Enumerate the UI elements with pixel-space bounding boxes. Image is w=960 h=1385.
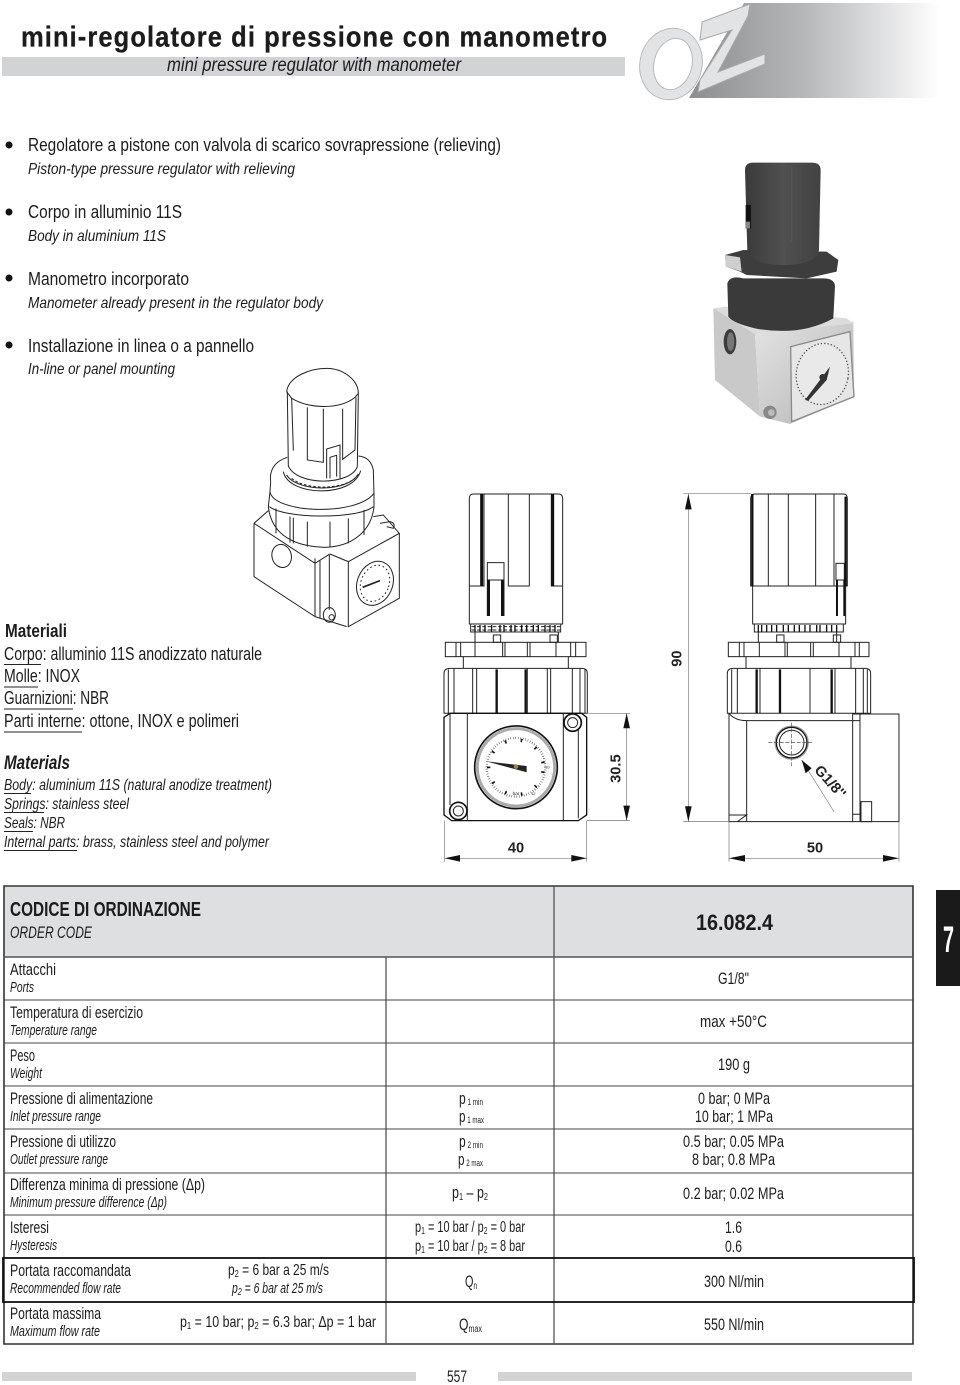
- row: outlet pressure: p: [458, 1150, 467, 1169]
- row: recommended flow rate, highlighted: 2: [235, 1269, 239, 1280]
- order table: [3, 886, 914, 1344]
- row: outlet pressure: 2 max: [464, 1158, 483, 1168]
- row: minimum pressure difference: p: [452, 1183, 461, 1202]
- feature list: Regolatore a pistone con valvola di scarico sovrapressione (relieving): [28, 135, 501, 155]
- row: maximum flow rate: = 6.3 bar; Δp = 1 bar: [259, 1314, 377, 1331]
- side elevation technical drawing: [670, 493, 899, 862]
- row: minimum pressure difference: 2: [484, 1192, 488, 1203]
- row: inlet pressure: 1 min: [466, 1097, 483, 1107]
- dimension 50: [729, 822, 899, 862]
- row: recommended flow rate, highlighted: Q: [465, 1272, 478, 1291]
- table header: ORDER CODE: [10, 923, 92, 942]
- row: ports: G1/8": [718, 969, 749, 988]
- row: minimum pressure difference: Differenza minima di pressione (Δp): [10, 1175, 205, 1194]
- row: weight: [10, 1046, 750, 1082]
- materials block: Italian: Corpo: alluminio 11S anodizzato naturale: [4, 644, 262, 664]
- row: weight: Weight: [10, 1066, 43, 1082]
- row: weight: 190 g: [718, 1055, 750, 1074]
- row: recommended flow rate, highlighted: 2: [237, 1287, 242, 1298]
- row: outlet pressure: Pressione di utilizzo: [10, 1132, 116, 1151]
- row: maximum flow rate: 1: [187, 1321, 192, 1332]
- materials block: English: Materials: [4, 753, 70, 774]
- row: hysteresis: Isteresi: [10, 1218, 49, 1237]
- row: hysteresis: p: [415, 1238, 424, 1255]
- row: minimum pressure difference: p: [477, 1183, 486, 1202]
- flange and nut front: [444, 642, 587, 713]
- row: recommended flow rate, highlighted: p: [232, 1281, 240, 1297]
- title: mini-regolatore di pressione con manometro: [21, 20, 607, 53]
- row: maximum flow rate: Q: [459, 1315, 472, 1334]
- row: hysteresis: 1: [421, 1226, 425, 1237]
- row: outlet pressure: 8 bar; 0.8 MPa: [692, 1150, 775, 1169]
- row: maximum flow rate: Portata massima: [10, 1304, 101, 1323]
- row: recommended flow rate, highlighted: Portata raccomandata: [10, 1261, 131, 1280]
- row: temperature: max +50°C: [700, 1012, 767, 1031]
- row: outlet pressure: Outlet pressure range: [10, 1152, 108, 1168]
- row: minimum pressure difference: 1: [459, 1192, 463, 1203]
- feature list: In-line or panel mounting: [28, 361, 175, 378]
- row: ports: Ports: [10, 980, 34, 996]
- footer with page number: [2, 1367, 912, 1385]
- dimension G1/8: [802, 760, 849, 812]
- row: temperature: Temperature range: [10, 1023, 97, 1039]
- row: recommended flow rate, highlighted: = 6 bar a 25 m/s: [239, 1262, 329, 1279]
- isometric line drawing of regulator: [254, 368, 400, 627]
- row: ports: [10, 960, 749, 996]
- row: recommended flow rate, highlighted: [3, 1258, 914, 1302]
- row: temperature: [10, 1003, 767, 1039]
- row: hysteresis: = 8 bar: [488, 1238, 525, 1255]
- row: minimum pressure difference: 0.2 bar; 0.02 MPa: [683, 1184, 784, 1203]
- row: maximum flow rate: = 10 bar; p: [191, 1314, 254, 1331]
- subtitle band: [2, 55, 625, 76]
- row: inlet pressure: 1 max: [465, 1115, 484, 1125]
- dimension 30.5: 30.5: [609, 754, 625, 783]
- row: ports: Attacchi: [10, 960, 56, 979]
- row: hysteresis: p: [415, 1219, 424, 1236]
- row: inlet pressure: Inlet pressure range: [10, 1109, 101, 1125]
- row: minimum pressure difference: –: [463, 1183, 477, 1202]
- row: recommended flow rate, highlighted: p: [228, 1262, 237, 1279]
- row: inlet pressure: p: [459, 1089, 468, 1108]
- row: maximum flow rate: [10, 1304, 764, 1340]
- row: recommended flow rate, highlighted: n: [473, 1281, 477, 1292]
- row: hysteresis: 0.6: [725, 1237, 742, 1256]
- row: inlet pressure: 0 bar; 0 MPa: [698, 1089, 770, 1108]
- row: hysteresis: 1: [421, 1245, 425, 1256]
- row: maximum flow rate: max: [468, 1324, 482, 1335]
- row: hysteresis: 1.6: [725, 1218, 742, 1237]
- row: inlet pressure: 10 bar; 1 MPa: [695, 1107, 773, 1126]
- body front with gauge: 10: [545, 765, 550, 770]
- row: minimum pressure difference: [10, 1175, 784, 1211]
- materials block: Italian: Parti interne: ottone, INOX e polimeri: [4, 711, 239, 731]
- body front with gauge: bar: [513, 791, 520, 796]
- body front with gauge: [444, 713, 587, 821]
- table header: [4, 886, 913, 957]
- feature list: [6, 135, 501, 378]
- row: hysteresis: = 10 bar / p: [425, 1238, 484, 1255]
- row: minimum pressure difference: Minimum pressure difference (Δp): [10, 1195, 167, 1211]
- row: temperature: Temperatura di esercizio: [10, 1003, 143, 1022]
- dimension 90: [670, 493, 751, 822]
- product photo: [713, 163, 854, 424]
- row: outlet pressure: [10, 1132, 784, 1169]
- flange and nut side: [727, 642, 871, 713]
- subtitle band: mini pressure regulator with manometer: [167, 55, 462, 76]
- dimension G1/8: G1/8'': [811, 763, 849, 802]
- materials block: Italian: Guarnizioni: NBR: [4, 688, 109, 708]
- row: inlet pressure: p: [459, 1107, 468, 1126]
- feature list: Manometer already present in the regulator body: [28, 295, 324, 312]
- logo: az with grey gradient band: [632, 3, 940, 106]
- row: hysteresis: Hysteresis: [10, 1238, 57, 1254]
- materials block: Italian: [4, 621, 262, 732]
- row: outlet pressure: 0.5 bar; 0.05 MPa: [683, 1132, 784, 1151]
- knob front: [469, 494, 563, 642]
- body side with port: [729, 713, 899, 822]
- body front with gauge: 12: [531, 791, 536, 796]
- feature list: Piston-type pressure regulator with relieving: [28, 161, 295, 178]
- row: hysteresis: 2: [484, 1245, 488, 1256]
- dimension 30.5: [587, 713, 630, 821]
- row: maximum flow rate: Maximum flow rate: [10, 1324, 100, 1340]
- row: inlet pressure: [10, 1089, 773, 1126]
- row: maximum flow rate: p: [180, 1314, 189, 1331]
- table header: 16.082.4: [696, 910, 774, 935]
- row: weight: Peso: [10, 1046, 35, 1065]
- row: recommended flow rate, highlighted: = 6 bar at 25 m/s: [242, 1281, 323, 1297]
- dimension 40: [445, 821, 587, 862]
- materials block: English: Body: aluminium 11S (natural anodize treatment): [4, 777, 272, 794]
- feature list: Manometro incorporato: [28, 269, 189, 289]
- materials block: Italian: Materiali: [5, 621, 67, 641]
- feature list: Corpo in alluminio 11S: [28, 202, 182, 222]
- materials block: English: Springs: stainless steel: [4, 796, 129, 813]
- row: hysteresis: = 10 bar / p: [425, 1219, 484, 1236]
- materials block: English: Seals: NBR: [4, 815, 65, 832]
- table header: CODICE DI ORDINAZIONE: [10, 899, 201, 921]
- dimension 90: 90: [670, 650, 686, 667]
- knob side: [751, 494, 847, 642]
- row: hysteresis: = 0 bar: [488, 1219, 525, 1236]
- row: recommended flow rate, highlighted: Recommended flow rate: [10, 1281, 121, 1297]
- materials block: English: [4, 753, 272, 851]
- feature list: Body in aluminium 11S: [28, 228, 166, 245]
- materials block: Italian: Molle: INOX: [4, 666, 80, 686]
- feature list: Installazione in linea o a pannello: [28, 336, 254, 356]
- row: hysteresis: [10, 1218, 742, 1256]
- dimension 50: 50: [807, 840, 823, 856]
- row: hysteresis: 2: [484, 1226, 488, 1237]
- row: inlet pressure: Pressione di alimentazione: [10, 1089, 153, 1108]
- materials block: English: Internal parts: brass, stainless steel and polymer: [4, 834, 270, 851]
- row: outlet pressure: 2 min: [466, 1140, 483, 1150]
- front elevation technical drawing: [444, 494, 630, 862]
- row: outlet pressure: p: [459, 1132, 468, 1151]
- chapter tab: [936, 890, 960, 986]
- row: maximum flow rate: 550 Nl/min: [704, 1315, 764, 1334]
- dimension 40: 40: [508, 840, 524, 856]
- row: recommended flow rate, highlighted: 300 Nl/min: [704, 1272, 764, 1291]
- row: maximum flow rate: 2: [254, 1321, 259, 1332]
